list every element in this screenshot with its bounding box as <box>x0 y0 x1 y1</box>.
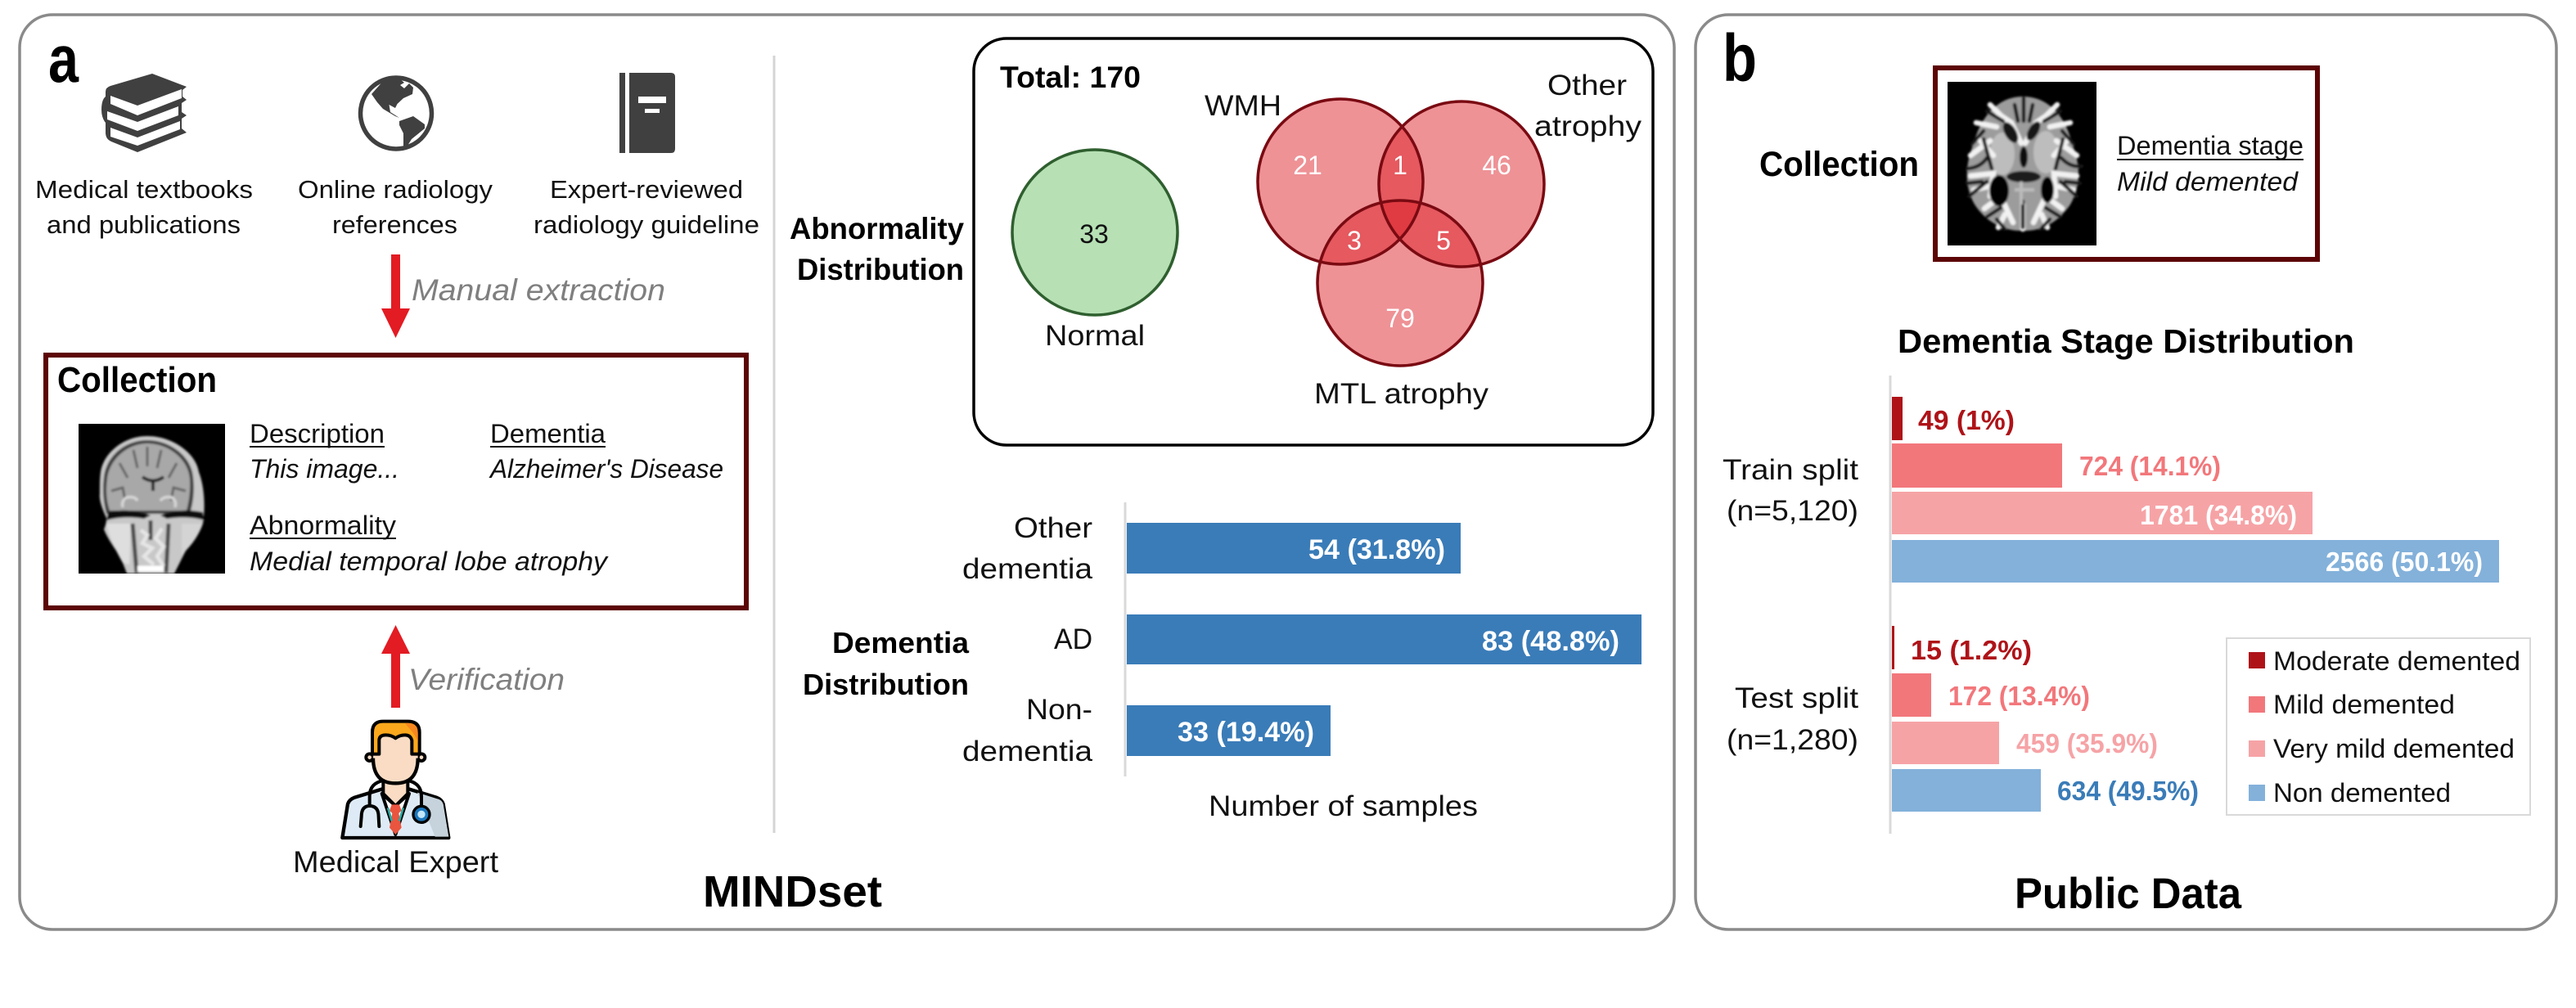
arrow: verification <box>381 625 410 708</box>
panel label a: a <box>48 22 79 97</box>
label: MTL atrophy: MTL atrophy <box>1314 378 1489 410</box>
label: other atrophy: Other <box>1547 70 1627 101</box>
source label: guideline: radiology guideline <box>534 210 759 239</box>
bar: AD <box>1054 614 1642 664</box>
circle: normal: 33 <box>1079 219 1109 249</box>
field: dementia stage <box>2117 131 2304 196</box>
group: train split: 49 (1%) <box>1918 405 2015 435</box>
circle: normal <box>1012 150 1178 315</box>
group: test split <box>1727 626 2199 812</box>
group: train split: 1781 (34.8%) <box>2140 500 2297 530</box>
group: train split <box>1723 397 2499 583</box>
bar: non-dementia: 33 (19.4%) <box>1178 717 1314 748</box>
legend: Mild demented <box>2273 690 2455 719</box>
label: normal: Normal <box>1045 320 1145 352</box>
group: train split: 724 (14.1%) <box>2079 451 2221 481</box>
abnormality distribution heading: Distribution <box>797 253 964 286</box>
collection box <box>46 355 746 608</box>
collection box <box>1935 68 2317 259</box>
image: coronal brain MRI <box>79 424 225 574</box>
axis title: Number of samples <box>1209 790 1478 822</box>
icon: guideline book <box>619 73 675 153</box>
venn: abnormalities: 3 <box>1347 226 1362 255</box>
bar: AD: AD <box>1054 623 1092 655</box>
legend: Very mild demented <box>2273 734 2515 763</box>
collection heading: Collection <box>1759 145 1919 184</box>
bar: other dementia: dementia <box>962 553 1093 585</box>
source label: online references <box>298 175 493 239</box>
expert label: Medical Expert <box>293 845 499 879</box>
icon: globe <box>360 78 432 149</box>
abnormality distribution heading <box>790 212 964 286</box>
source label: textbooks <box>35 175 253 239</box>
source label: online references: references <box>332 210 457 239</box>
field: description <box>250 419 399 484</box>
venn: abnormalities: 46 <box>1482 151 1511 180</box>
panel title: Public Data: Public Data <box>2015 870 2241 918</box>
field: abnormality: Medial temporal lobe atrophy <box>250 547 609 576</box>
collection heading: Collection <box>57 360 217 400</box>
label: WMH: WMH <box>1205 90 1281 122</box>
group: train split: (n=5,120) <box>1727 495 1858 527</box>
venn: abnormalities: 21 <box>1293 151 1322 180</box>
source label: textbooks: Medical textbooks <box>35 175 253 204</box>
image: axial brain MRI <box>1948 82 2096 245</box>
field: description: Description <box>250 419 385 448</box>
label: other atrophy: atrophy <box>1534 110 1642 142</box>
panel title: MINDset: MINDset <box>703 867 882 916</box>
legend: Moderate demented <box>2273 646 2520 676</box>
group: train split: 2566 (50.1%) <box>2326 547 2483 577</box>
arrow: manual extraction <box>381 254 410 338</box>
bar: non-dementia: Non- <box>1026 694 1092 726</box>
source label: guideline <box>534 175 759 239</box>
bar: other dementia: 54 (31.8%) <box>1308 534 1445 565</box>
venn: abnormalities: 1 <box>1393 151 1407 180</box>
field: dementia stage: Dementia stage <box>2117 131 2304 160</box>
label: other atrophy <box>1534 70 1642 142</box>
group: test split: 634 (49.5%) <box>2057 776 2199 806</box>
venn: abnormalities: 5 <box>1436 226 1451 255</box>
field: dementia: Dementia <box>490 419 606 448</box>
venn: abnormalities <box>1258 99 1544 366</box>
field: dementia <box>489 419 723 484</box>
field: dementia stage: Mild demented <box>2117 167 2299 196</box>
bar: non-dementia <box>962 694 1331 767</box>
total count: Total: 170 <box>1000 61 1141 94</box>
group: test split: 172 (13.4%) <box>1948 681 2090 711</box>
venn: abnormalities: 79 <box>1385 304 1415 333</box>
arrow label: manual extraction: Manual extraction <box>412 273 665 307</box>
bar: non-dementia: dementia <box>962 736 1093 767</box>
panel a: MINDset <box>20 15 1674 929</box>
group: test split: Test split <box>1735 682 1858 714</box>
panel: venn diagram <box>974 38 1653 445</box>
bar chart: dementia distribution <box>962 502 1642 822</box>
bar: AD: 83 (48.8%) <box>1482 626 1619 657</box>
chart title: Dementia Stage Distribution <box>1898 322 2354 360</box>
group: train split: Train split <box>1723 454 1858 486</box>
bar: other dementia <box>962 512 1461 585</box>
source label: online references: Online radiology <box>298 175 493 204</box>
source label: guideline: Expert-reviewed <box>550 175 743 204</box>
group: test split: (n=1,280) <box>1727 724 1858 756</box>
dementia distribution heading: Dementia <box>832 626 970 659</box>
field: abnormality: Abnormality <box>250 511 396 540</box>
dementia distribution heading <box>803 626 970 701</box>
icon: medical expert <box>342 722 448 838</box>
panel label b: b <box>1723 21 1757 96</box>
arrow label: verification: Verification <box>408 663 565 696</box>
group: test split: 15 (1.2%) <box>1911 635 2032 665</box>
source label: textbooks: and publications <box>47 210 241 239</box>
field: dementia: Alzheimer's Disease <box>489 454 723 484</box>
field: abnormality <box>250 511 609 576</box>
group: test split: 459 (35.9%) <box>2016 728 2158 758</box>
icon: stack of books <box>101 74 187 152</box>
legend: Non demented <box>2273 778 2451 808</box>
legend <box>2227 638 2530 815</box>
bar chart: dementia stage distribution <box>1723 376 2530 834</box>
panel b: Public Data <box>1696 15 2556 929</box>
bar: other dementia: Other <box>1014 512 1092 544</box>
dementia distribution heading: Distribution <box>803 668 969 701</box>
abnormality distribution heading: Abnormality <box>790 212 964 245</box>
field: description: This image... <box>250 454 399 484</box>
